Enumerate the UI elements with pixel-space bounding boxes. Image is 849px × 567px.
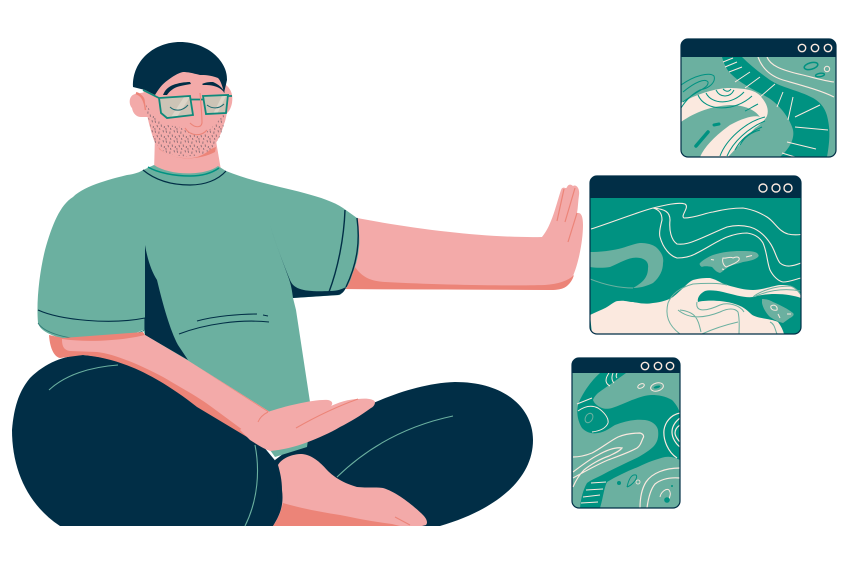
- loop outline: [681, 74, 714, 108]
- left leg line: [49, 365, 258, 526]
- man: [12, 42, 583, 526]
- teal band: [722, 57, 829, 157]
- left ear: [130, 92, 148, 117]
- window: top: [681, 39, 836, 157]
- window buttons: [798, 44, 832, 52]
- left leg: [12, 355, 283, 526]
- hair: [133, 42, 227, 95]
- arm underside: [340, 267, 574, 290]
- sleeve hem left: [38, 310, 145, 330]
- glasses: [143, 90, 232, 118]
- cream band: [681, 88, 768, 157]
- window frame bottom: [572, 358, 680, 508]
- eyebrows: [163, 82, 225, 95]
- contour lines: [577, 373, 617, 432]
- neck: [154, 135, 222, 176]
- foot: [273, 454, 427, 526]
- right sleeve lines: [329, 210, 358, 292]
- cuff under hand: [270, 440, 308, 457]
- teal band: [577, 373, 680, 508]
- window buttons: [759, 184, 792, 192]
- finger lines: [557, 188, 577, 242]
- small marks: [696, 132, 708, 146]
- window frame middle: [590, 176, 801, 334]
- window: bottom: [572, 358, 680, 508]
- contour lines: [591, 203, 801, 282]
- collar: [143, 170, 226, 185]
- nose and mouth: [185, 93, 207, 135]
- window buttons: [641, 362, 674, 370]
- beard stubble: [146, 105, 225, 156]
- resting hand: [240, 399, 375, 451]
- face: [143, 62, 228, 158]
- window frame top: [681, 39, 836, 157]
- right leg line: [337, 416, 453, 477]
- contour lines: [758, 57, 834, 97]
- cream ground: [590, 278, 801, 334]
- title bar: [572, 358, 680, 373]
- right ear: [226, 85, 232, 114]
- title bar: [681, 39, 836, 57]
- window: middle: [590, 176, 801, 334]
- armpit fold: [270, 225, 346, 298]
- shirt shadow fold: [145, 245, 188, 360]
- head: [130, 42, 232, 158]
- belly folds: [179, 314, 269, 334]
- small marks: [637, 383, 645, 389]
- shirt: [37, 165, 359, 452]
- neck shadow: [158, 143, 216, 158]
- islands: [700, 251, 759, 273]
- cream arcs: [698, 89, 765, 156]
- raised arm: [340, 185, 583, 290]
- title bar: [590, 176, 801, 198]
- right leg: [275, 382, 533, 526]
- sage swoosh: [590, 243, 663, 288]
- lower arm: [49, 332, 300, 452]
